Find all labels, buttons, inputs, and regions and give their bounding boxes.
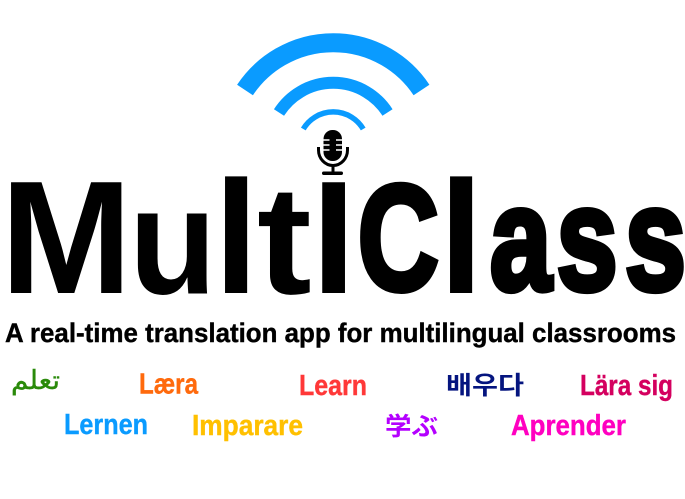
word: Spanish: Aprender	[511, 410, 626, 442]
title: C	[358, 155, 439, 323]
icon: microphone	[318, 130, 348, 175]
title: I	[312, 148, 356, 327]
title: s	[557, 157, 618, 321]
title: u	[129, 158, 217, 326]
title: M	[0, 148, 132, 327]
word: Italian: Imparare	[192, 410, 303, 442]
tagline: A real-time translation app for multilingual classrooms	[5, 318, 676, 348]
word: Arabic: تعلم	[11, 366, 60, 396]
title: t	[257, 154, 312, 326]
word: Danish: Læra	[139, 368, 199, 400]
language words	[11, 366, 673, 442]
word: Japanese: 学ぶ	[385, 413, 438, 441]
word: English: Learn	[299, 370, 367, 402]
title: l	[214, 148, 259, 328]
word: Korean: 배우다	[446, 372, 524, 400]
title: l	[439, 148, 484, 328]
title: a	[490, 156, 553, 321]
title: s	[625, 157, 685, 321]
word: German: Lernen	[64, 409, 148, 441]
icon: wireless signal arcs	[245, 43, 422, 129]
title	[0, 148, 685, 328]
